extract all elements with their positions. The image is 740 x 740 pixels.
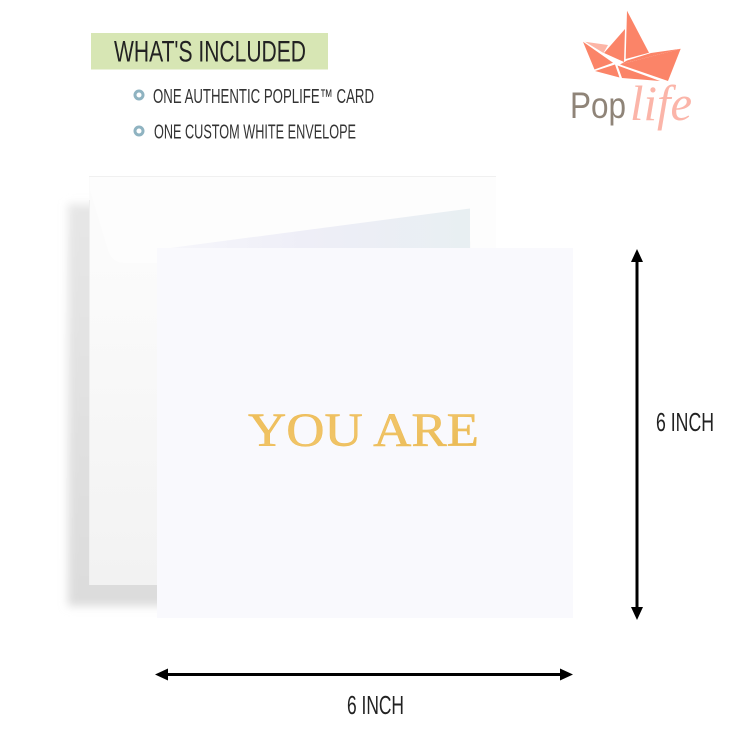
envelope shadow: [68, 204, 188, 606]
foil text: YOU ARE: YOU ARE: [248, 404, 479, 457]
card: [157, 248, 573, 618]
logo: Poplife: [570, 11, 692, 131]
label: width: 6 INCH: [347, 690, 404, 720]
wordmark: life: life: [630, 75, 692, 131]
heading: what's included: [91, 33, 328, 70]
label: height: 6 INCH: [656, 407, 714, 437]
list item: card: [135, 86, 374, 108]
envelope flap: [90, 177, 496, 263]
icon: origami boat: [583, 11, 681, 81]
heading: what's included: WHAT'S INCLUDED: [114, 36, 306, 68]
envelope inner pocket: [170, 208, 470, 248]
arrow: vertical height: [631, 249, 643, 620]
list item: envelope: [135, 122, 356, 144]
wordmark: Pop: Pop: [570, 85, 626, 126]
card face: [157, 248, 573, 618]
arrow: horizontal width: [155, 668, 573, 680]
list item: card: ONE AUTHENTIC POPLIFE™ CARD: [153, 86, 374, 108]
envelope body: [89, 176, 496, 585]
envelope: [68, 176, 496, 606]
list item: envelope: ONE CUSTOM WHITE ENVELOPE: [154, 122, 356, 144]
list: included items: [135, 86, 374, 144]
